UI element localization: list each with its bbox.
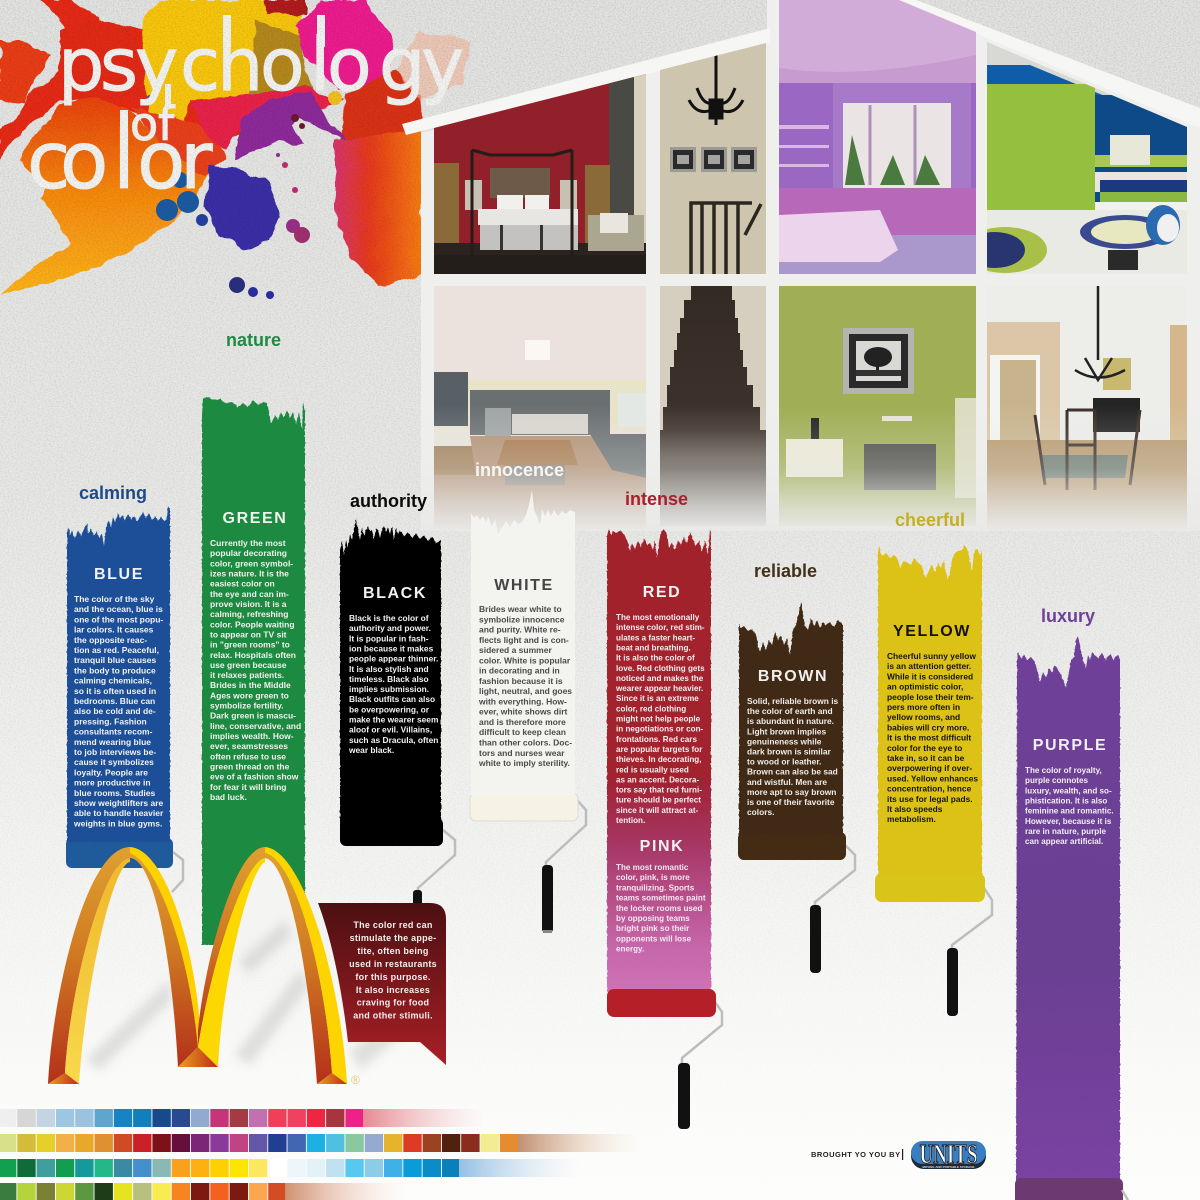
- callout text: and other stimuli.: [353, 1011, 433, 1021]
- green text: symbolize fertility.: [210, 701, 284, 711]
- black text: ion because it makes: [349, 643, 434, 653]
- purple heading: PURPLE: [1033, 737, 1107, 754]
- purple text: The color of royalty,: [1025, 766, 1102, 775]
- room: purple bedroom: [779, 0, 976, 274]
- black text: timeless. Black also: [349, 674, 429, 684]
- red text: noticed and makes the: [616, 674, 704, 683]
- purple text: can appear artificial.: [1025, 837, 1103, 846]
- green text: Ages wore green to: [210, 690, 289, 700]
- arch interior mask: [229, 858, 306, 950]
- green text: to appear on TV sit: [210, 629, 287, 639]
- panel: purple: [1015, 636, 1128, 1200]
- red heading: RED: [643, 584, 681, 601]
- black paint: [340, 519, 441, 825]
- white roller: [470, 793, 586, 933]
- green text: ever, seamstresses: [210, 741, 288, 751]
- title: psychology: l: [310, 23, 330, 108]
- callout: red and appetite: [318, 903, 446, 1065]
- pink text: The most romantic: [616, 863, 689, 872]
- title: psychology: y: [421, 23, 464, 108]
- white text: symbolize innocence: [479, 614, 565, 624]
- brown text: is one of their favorite: [747, 797, 835, 807]
- pink text: color, pink, is more: [616, 873, 690, 882]
- white heading: WHITE: [494, 577, 554, 594]
- blue text: tion as red. Peaceful,: [74, 645, 159, 655]
- green text: Dark green is mascu-: [210, 711, 296, 721]
- red text: ture should be perfect: [616, 796, 701, 805]
- blue text: loyalty. People are: [74, 767, 148, 777]
- paint splash: [0, 0, 470, 295]
- title: psychology: o: [327, 23, 372, 108]
- green text: implies wealth. How-: [210, 731, 294, 741]
- title: tall ascenders: [120, 15, 325, 134]
- yellow text: color for the eye to: [887, 743, 962, 753]
- color swatch strips: [0, 1109, 640, 1200]
- yellow heading: YELLOW: [893, 623, 971, 640]
- green text: use green because: [210, 660, 287, 670]
- green text: often refuse to use: [210, 751, 286, 761]
- white text: flects light and is con-: [479, 635, 569, 645]
- green text: Brides in the Middle: [210, 680, 291, 690]
- callout text: used in restaurants: [349, 959, 437, 969]
- blue heading: BLUE: [94, 566, 144, 583]
- title: of: o: [130, 97, 158, 151]
- blue paint: [67, 506, 170, 842]
- golden arches logo: [48, 847, 347, 1084]
- callout text: for this purpose.: [355, 972, 431, 982]
- units logo: MOVING AND PORTABLE STORAGE: [922, 1165, 975, 1169]
- yellow text: yellow rooms, and: [887, 712, 960, 722]
- black text: wear black.: [348, 745, 394, 755]
- red text: tors say that red furni-: [616, 786, 702, 795]
- red text: red is usually used: [616, 765, 689, 774]
- red text: are popular targets for: [616, 745, 703, 754]
- white text: difficult to keep clean: [479, 727, 566, 737]
- blue text: blue rooms. Studies: [74, 788, 156, 798]
- yellow text: people lose their tem-: [887, 692, 974, 702]
- brown text: and wistful. Men are: [747, 777, 827, 787]
- green text: easiest color on: [210, 579, 275, 589]
- black text: aloof or evil. Villains,: [349, 725, 432, 735]
- callout text: stimulate the appe-: [350, 933, 436, 943]
- house frame: [421, 0, 1200, 530]
- red text: tention.: [616, 816, 645, 825]
- green text: green thread on the: [210, 762, 290, 772]
- blue text: able to handle heavier: [74, 808, 164, 818]
- green text: izes nature. It is the: [210, 568, 289, 578]
- title: psychology: p: [58, 23, 104, 108]
- black text: people appear thinner.: [349, 654, 438, 664]
- yellow text: metabolism.: [887, 814, 936, 824]
- footer credit: [811, 1139, 986, 1169]
- blue text: one of the most popu-: [74, 614, 163, 624]
- title: color: l: [113, 115, 135, 207]
- green text: eve of a fashion show: [210, 772, 299, 782]
- pink text: the locker rooms used: [616, 904, 702, 913]
- red roller: [678, 1002, 722, 1129]
- white text: in decorating and in: [479, 666, 560, 676]
- pink text: bright pink so their: [616, 924, 690, 933]
- yellow text: pers more often in: [887, 702, 960, 712]
- title: psychology: h: [217, 23, 263, 108]
- house: [402, 0, 1200, 530]
- credit divider: [902, 1149, 903, 1160]
- swatch row 3: [0, 1159, 583, 1177]
- white paint: [471, 490, 575, 795]
- pink text: teams sometimes paint: [616, 894, 706, 903]
- label: innocence: innocence: [475, 460, 564, 480]
- blue text: more productive in: [74, 778, 151, 788]
- green text: color. People waiting: [210, 619, 295, 629]
- brown text: genuineness while: [747, 736, 822, 746]
- blue text: tranquil blue causes: [74, 655, 156, 665]
- pink heading: PINK: [640, 838, 684, 855]
- room: green lounge: [779, 286, 976, 526]
- white text: tors and nurses wear: [479, 748, 565, 758]
- red text: thieves. In decorating,: [616, 755, 701, 764]
- blue text: pressing. Fashion: [74, 716, 147, 726]
- black text: such as Dracula, often: [349, 735, 438, 745]
- pink text: by opposing teams: [616, 914, 690, 923]
- title: color: o: [137, 115, 185, 207]
- blue text: to job interviews be-: [74, 747, 156, 757]
- callout shape: [318, 903, 446, 1065]
- label: intense: intense: [625, 489, 688, 509]
- purple roller: [1015, 1178, 1128, 1200]
- roof beams: [402, 0, 1200, 135]
- title: color: r: [180, 115, 213, 207]
- room: hallway with chandelier: [660, 40, 766, 274]
- black text: authority and power.: [349, 623, 431, 633]
- arch shadows: [85, 980, 425, 1070]
- green text: for fear it will bring: [210, 782, 287, 792]
- title: psychology: c: [180, 23, 220, 108]
- yellow text: While it is considered: [887, 671, 973, 681]
- white text: and is therefore more: [479, 717, 566, 727]
- brown roller: [738, 832, 855, 973]
- black heading: BLACK: [363, 585, 427, 602]
- label: luxury: luxury: [1041, 606, 1095, 626]
- red text: beat and breathing.: [616, 643, 691, 652]
- yellow text: its use for legal pads.: [887, 794, 973, 804]
- yellow text: an optimistic color,: [887, 682, 963, 692]
- white text: with everything. How-: [478, 696, 567, 706]
- red text: It is also the color of: [616, 654, 695, 663]
- yellow roller: [875, 873, 992, 1016]
- brown text: Light brown implies: [747, 726, 826, 736]
- green text: popular decorating: [210, 548, 287, 558]
- green text: Currently the most: [210, 538, 286, 548]
- blue text: bedrooms. Blue can: [74, 696, 155, 706]
- purple text: luxury, wealth, and so-: [1025, 786, 1112, 795]
- blue text: so it is often used in: [74, 686, 156, 696]
- panel: white: [470, 490, 586, 933]
- white text: than other colors. Doc-: [479, 738, 572, 748]
- white text: sidered a summer: [479, 645, 552, 655]
- blue text: show weightlifters are: [74, 798, 164, 808]
- splash droplets: [147, 91, 342, 299]
- pink text: tranquilizing. Sports: [616, 883, 695, 892]
- white text: white to imply sterility.: [478, 758, 570, 768]
- black text: Black is the color of: [349, 613, 429, 623]
- inner shadow: [235, 920, 310, 1065]
- blue text: The color of the sky: [74, 594, 155, 604]
- callout text: It also increases: [356, 985, 430, 995]
- green text: prove vision. It is a: [210, 599, 287, 609]
- panel: red and pink: [607, 529, 722, 1129]
- green text: line, conservative, and: [210, 721, 301, 731]
- pink text: energy.: [616, 945, 644, 954]
- yellow text: It is the most difficult: [887, 733, 971, 743]
- red text: love. Red clothing gets: [616, 664, 705, 673]
- yellow text: take in, so it can be: [887, 753, 965, 763]
- yellow text: overpowering if over-: [887, 763, 972, 773]
- black text: be overpowering, or: [349, 704, 430, 714]
- yellow text: is an attention getter.: [887, 661, 971, 671]
- red text: intense color, red stim-: [616, 623, 705, 632]
- brown text: colors.: [747, 807, 774, 817]
- red text: might not help people: [616, 714, 701, 724]
- title: color: o: [60, 115, 108, 207]
- blue text: also be cold and de-: [74, 706, 156, 716]
- black text: implies submission.: [349, 684, 429, 694]
- panel: yellow: [875, 545, 992, 1016]
- lower house fade: [421, 405, 1200, 531]
- blue text: weights in blue gyms.: [73, 818, 162, 828]
- swatch row 1: [0, 1109, 484, 1127]
- brown text: Brown can also be sad: [747, 767, 838, 777]
- brown text: is abundant in nature.: [747, 716, 834, 726]
- title: color: c: [27, 115, 70, 207]
- title: [27, 15, 464, 207]
- blue text: and the ocean, blue is: [74, 604, 163, 614]
- brown text: more apt to say brown: [747, 787, 836, 797]
- swatch row 4: [0, 1183, 408, 1200]
- purple text: However, because it is: [1025, 817, 1112, 826]
- room: red bedroom: [434, 70, 646, 274]
- room: staircase: [660, 286, 766, 526]
- pink text: opponents will lose: [616, 934, 692, 943]
- yellow text: Cheerful sunny yellow: [887, 651, 976, 661]
- purple text: rare in nature, purple: [1025, 827, 1106, 836]
- panel: green: [202, 397, 305, 945]
- room: dining room: [987, 286, 1187, 530]
- red text: since it will attract at-: [616, 806, 699, 815]
- green text: color, green symbol-: [210, 558, 293, 568]
- red text: wearer appear heavier.: [615, 684, 703, 693]
- panel: black: [340, 519, 455, 906]
- title: psychology: s: [100, 23, 138, 108]
- panel: blue: [66, 506, 183, 892]
- label: nature: nature: [226, 330, 281, 350]
- blue text: calming chemicals,: [74, 676, 152, 686]
- red roller head: [607, 989, 716, 1017]
- blue text: consultants recom-: [74, 727, 153, 737]
- blue roller: [66, 838, 183, 892]
- title: psychology: o: [260, 23, 305, 108]
- callout text: craving for food: [357, 998, 429, 1008]
- white text: ever, white shows dirt: [479, 707, 568, 717]
- green text: bad luck.: [210, 792, 247, 802]
- purple text: feminine and romantic.: [1025, 807, 1114, 816]
- purple text: purple connotes: [1025, 776, 1088, 785]
- title: of: f: [158, 97, 176, 151]
- green text: relax. Hospitals often: [210, 650, 296, 660]
- black text: It is popular in fash-: [349, 633, 429, 643]
- blue text: the opposite reac-: [74, 635, 147, 645]
- red paint: [607, 529, 711, 992]
- green paint: [202, 397, 305, 945]
- brown text: Solid, reliable brown is: [747, 696, 839, 706]
- black text: Black outfits can also: [349, 694, 435, 704]
- yellow text: used. Yellow enhances: [887, 773, 978, 783]
- red text: frontations. Red cars: [616, 735, 697, 744]
- black roller: [340, 818, 455, 906]
- blue text: cause it symbolizes: [74, 757, 154, 767]
- red text: in negotiations or con-: [616, 725, 704, 734]
- white text: color. White is popular: [479, 655, 571, 665]
- yellow text: concentration, hence: [887, 784, 972, 794]
- white text: and purity. White re-: [479, 625, 561, 635]
- red text: color, red clothing: [616, 704, 686, 713]
- title: psychology: y: [135, 23, 178, 108]
- yellow text: It also speeds: [887, 804, 943, 814]
- callout text: The color red can: [353, 920, 433, 930]
- red text: Since it is an extreme: [616, 694, 699, 703]
- brown heading: BROWN: [758, 668, 828, 685]
- credit text: BROUGHT YO YOU BY: [811, 1150, 901, 1159]
- callout text: tite, often being: [357, 946, 429, 956]
- blue text: the body to produce: [74, 665, 156, 675]
- registered mark: ®: [351, 1073, 360, 1087]
- black text: make the wearer seem: [349, 714, 438, 724]
- green text: the eye and can im-: [210, 589, 289, 599]
- white text: light, neutral, and goes: [479, 686, 572, 696]
- brown text: to wood or leather.: [747, 757, 821, 767]
- green text: in "green rooms" to: [210, 640, 290, 650]
- green text: it relaxes patients.: [210, 670, 284, 680]
- label: calming: calming: [79, 483, 147, 503]
- room: green and blue kids room: [987, 42, 1187, 274]
- green heading: GREEN: [223, 510, 287, 527]
- red text: as an accent. Decora-: [616, 775, 700, 784]
- red text: ulates a faster heart-: [616, 633, 695, 642]
- room: kitchen: [434, 286, 646, 530]
- yellow text: babies will cry more.: [887, 722, 969, 732]
- red text: The most emotionally: [616, 613, 700, 622]
- purple text: phistication. It is also: [1025, 796, 1107, 805]
- brown text: dark brown is similar: [747, 746, 832, 756]
- yellow paint: [878, 545, 982, 875]
- label: cheerful: cheerful: [895, 510, 965, 530]
- blue text: lar colors. It causes: [74, 625, 154, 635]
- blue text: mend wearing blue: [74, 737, 151, 747]
- label: reliable: reliable: [754, 561, 817, 581]
- panel: brown: [738, 602, 855, 973]
- units logo: UNITS: [920, 1139, 978, 1169]
- swatch row 2: [0, 1134, 640, 1152]
- label: authority: authority: [350, 491, 427, 511]
- brown text: the color of earth and: [747, 706, 833, 716]
- green text: calming, refreshing: [210, 609, 288, 619]
- title: psychology: g: [379, 23, 425, 108]
- purple paint: [1016, 636, 1120, 1182]
- white text: Brides wear white to: [479, 604, 562, 614]
- white text: fashion because it is: [479, 676, 563, 686]
- black text: It is also stylish and: [349, 664, 429, 674]
- brown paint: [739, 602, 843, 835]
